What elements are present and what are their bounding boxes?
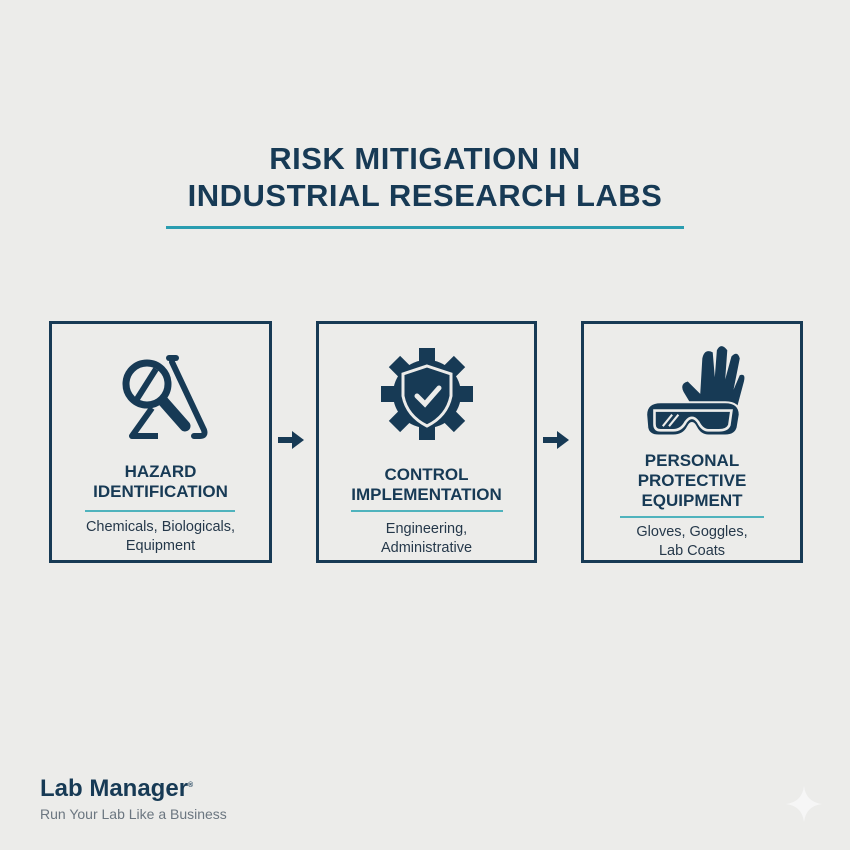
heading bbox=[351, 465, 502, 504]
arrow 1 bbox=[278, 431, 304, 449]
logo: Lab Manager: Lab Manager® bbox=[40, 775, 193, 802]
heading: PERSONAL bbox=[645, 451, 739, 470]
description bbox=[381, 521, 472, 556]
heading: PROTECTIVE bbox=[638, 471, 746, 490]
heading: HAZARD bbox=[125, 462, 196, 481]
panel: personal protective equipment bbox=[581, 321, 803, 563]
heading: IMPLEMENTATION bbox=[351, 485, 502, 504]
heading: EQUIPMENT bbox=[641, 491, 743, 510]
title underline bbox=[166, 226, 684, 229]
heading bbox=[93, 462, 228, 501]
description: Engineering, bbox=[386, 521, 467, 537]
heading: CONTROL bbox=[384, 465, 469, 484]
description: Gloves, Goggles, bbox=[636, 524, 748, 540]
title: INDUSTRIAL RESEARCH LABS bbox=[188, 178, 662, 213]
title: RISK MITIGATION IN bbox=[269, 141, 581, 176]
icon: sparkle bbox=[788, 788, 820, 820]
heading: IDENTIFICATION bbox=[93, 482, 228, 501]
description: Chemicals, Biologicals, bbox=[86, 519, 235, 535]
heading bbox=[638, 451, 746, 510]
logo: Lab Manager: Run Your Lab Like a Business bbox=[40, 806, 227, 822]
logo: Lab Manager bbox=[40, 775, 227, 822]
description bbox=[86, 519, 235, 554]
panel: control implementation bbox=[316, 321, 537, 563]
description: Lab Coats bbox=[659, 543, 725, 559]
description bbox=[636, 524, 748, 559]
title bbox=[188, 141, 662, 213]
panel: hazard identification bbox=[49, 321, 272, 563]
icon: glove and goggles bbox=[647, 346, 744, 434]
arrow 2 bbox=[543, 431, 569, 449]
icon: magnifier with triangle bbox=[122, 355, 208, 439]
icon: gear shield bbox=[381, 348, 473, 440]
description: Equipment bbox=[126, 538, 195, 554]
description: Administrative bbox=[381, 540, 472, 556]
